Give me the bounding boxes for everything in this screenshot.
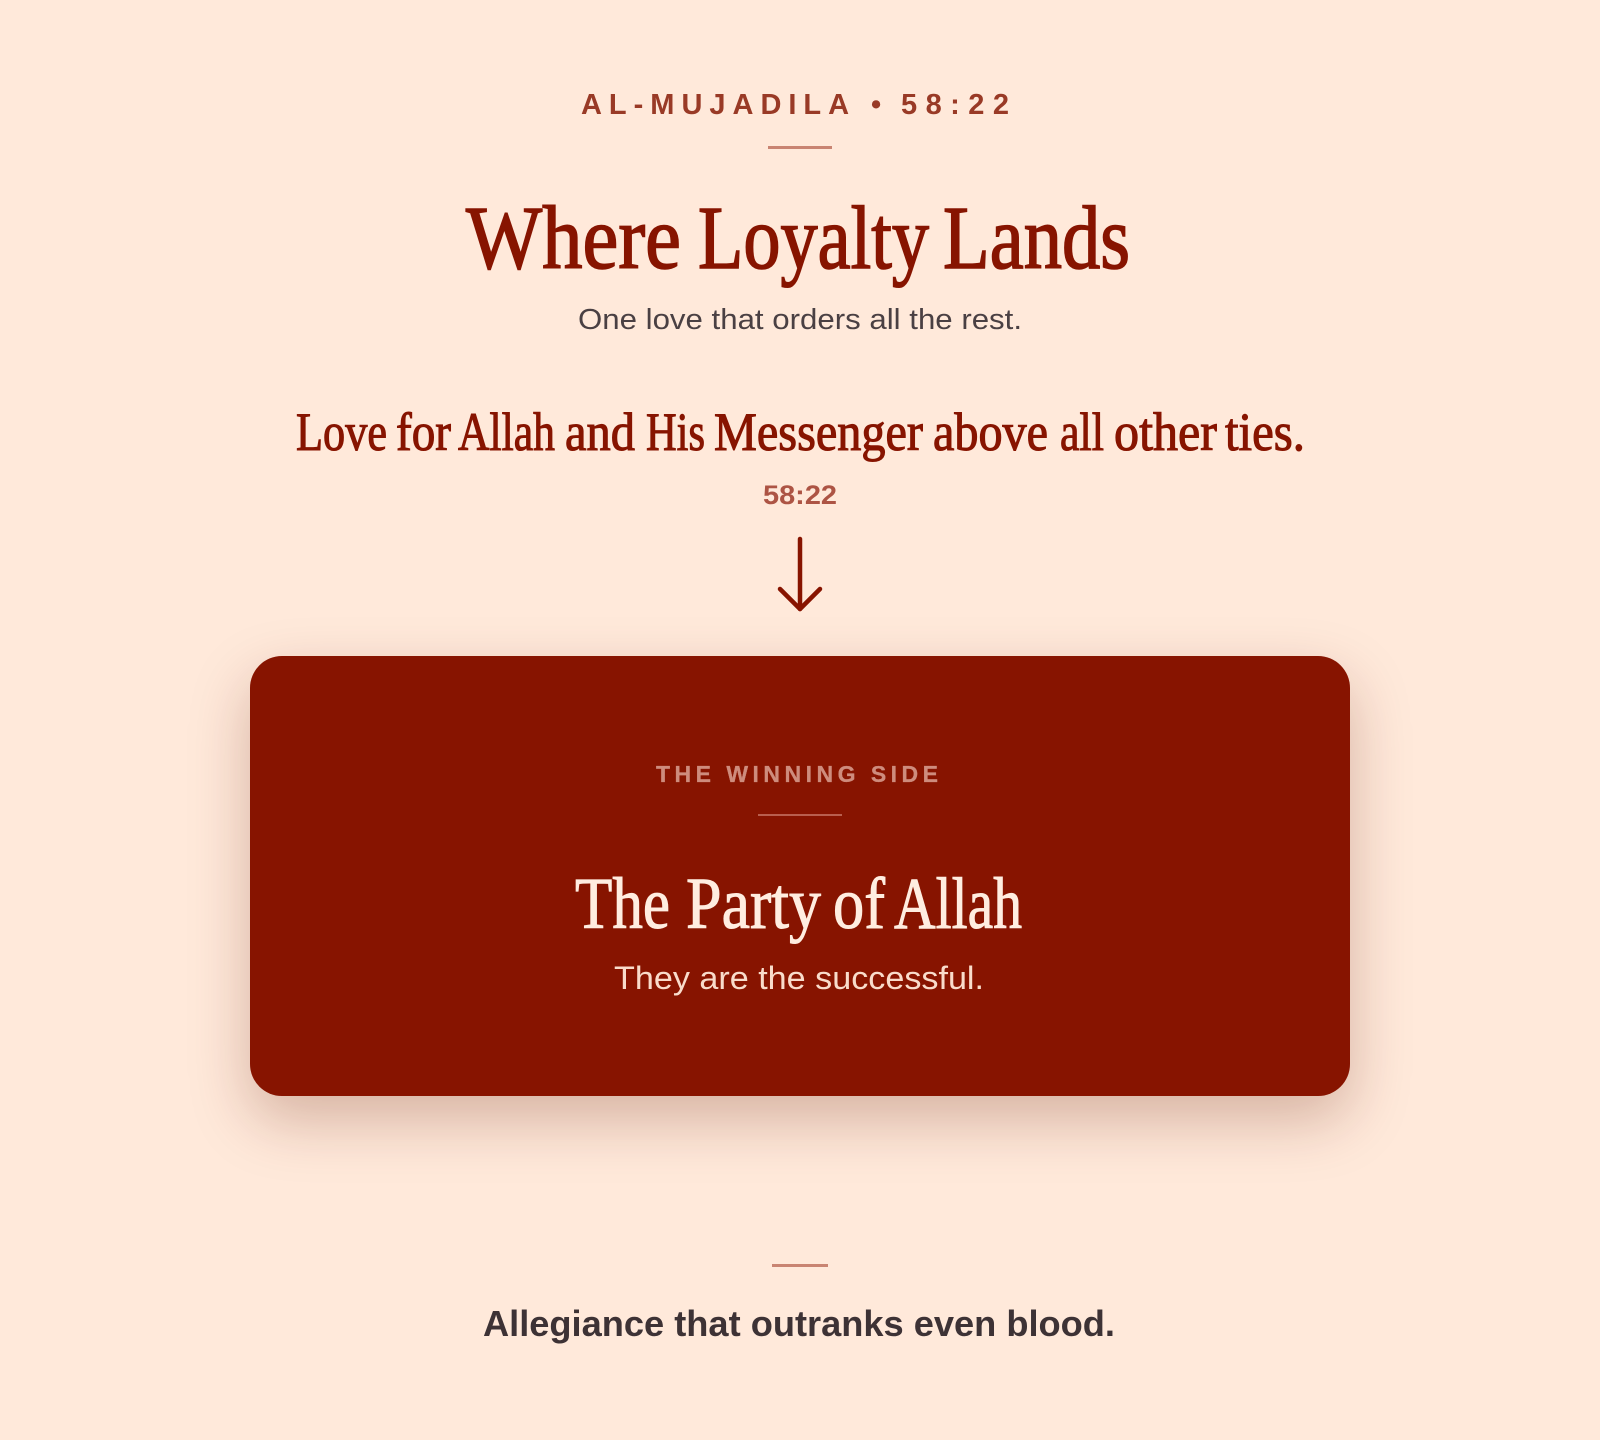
card divider [758, 814, 842, 816]
premise citation: 58:22 [763, 480, 837, 510]
card title: Party [686, 863, 821, 944]
kicker: surah reference: 58:22 [901, 89, 1009, 121]
header [466, 89, 1130, 336]
main title: Where [466, 189, 681, 288]
card label: THE WINNING SIDE [656, 761, 938, 787]
kicker: surah reference: AL-MUJADILA [581, 89, 849, 121]
kicker: surah reference: • [871, 89, 881, 121]
premise text: for [396, 402, 451, 462]
premise text: His [646, 402, 705, 462]
premise text: Messenger [714, 402, 923, 462]
subtitle: One love that orders all the rest. [578, 304, 1022, 336]
premise text: all [1060, 402, 1104, 462]
card subtitle: They are the successful. [614, 960, 984, 996]
arrow: down to result [780, 539, 820, 609]
card title: of [833, 863, 886, 944]
footer [483, 1264, 1115, 1344]
premise text: and [565, 402, 635, 462]
kicker divider [768, 146, 832, 149]
premise text: Love [296, 402, 387, 462]
main title: Lands [943, 189, 1130, 288]
card title: Allah [894, 863, 1022, 944]
footer divider [772, 1264, 828, 1267]
result card background [250, 656, 1350, 1096]
main title: Loyalty [698, 189, 929, 288]
premise text: other [1114, 402, 1217, 462]
premise text: Allah [458, 402, 555, 462]
panel: the winning side [575, 761, 1022, 996]
premise statement [296, 402, 1305, 510]
premise text: ties. [1225, 402, 1305, 462]
card title: The [575, 863, 670, 944]
premise text: above [933, 402, 1048, 462]
closing statement: Allegiance that outranks even blood. [483, 1303, 1115, 1344]
